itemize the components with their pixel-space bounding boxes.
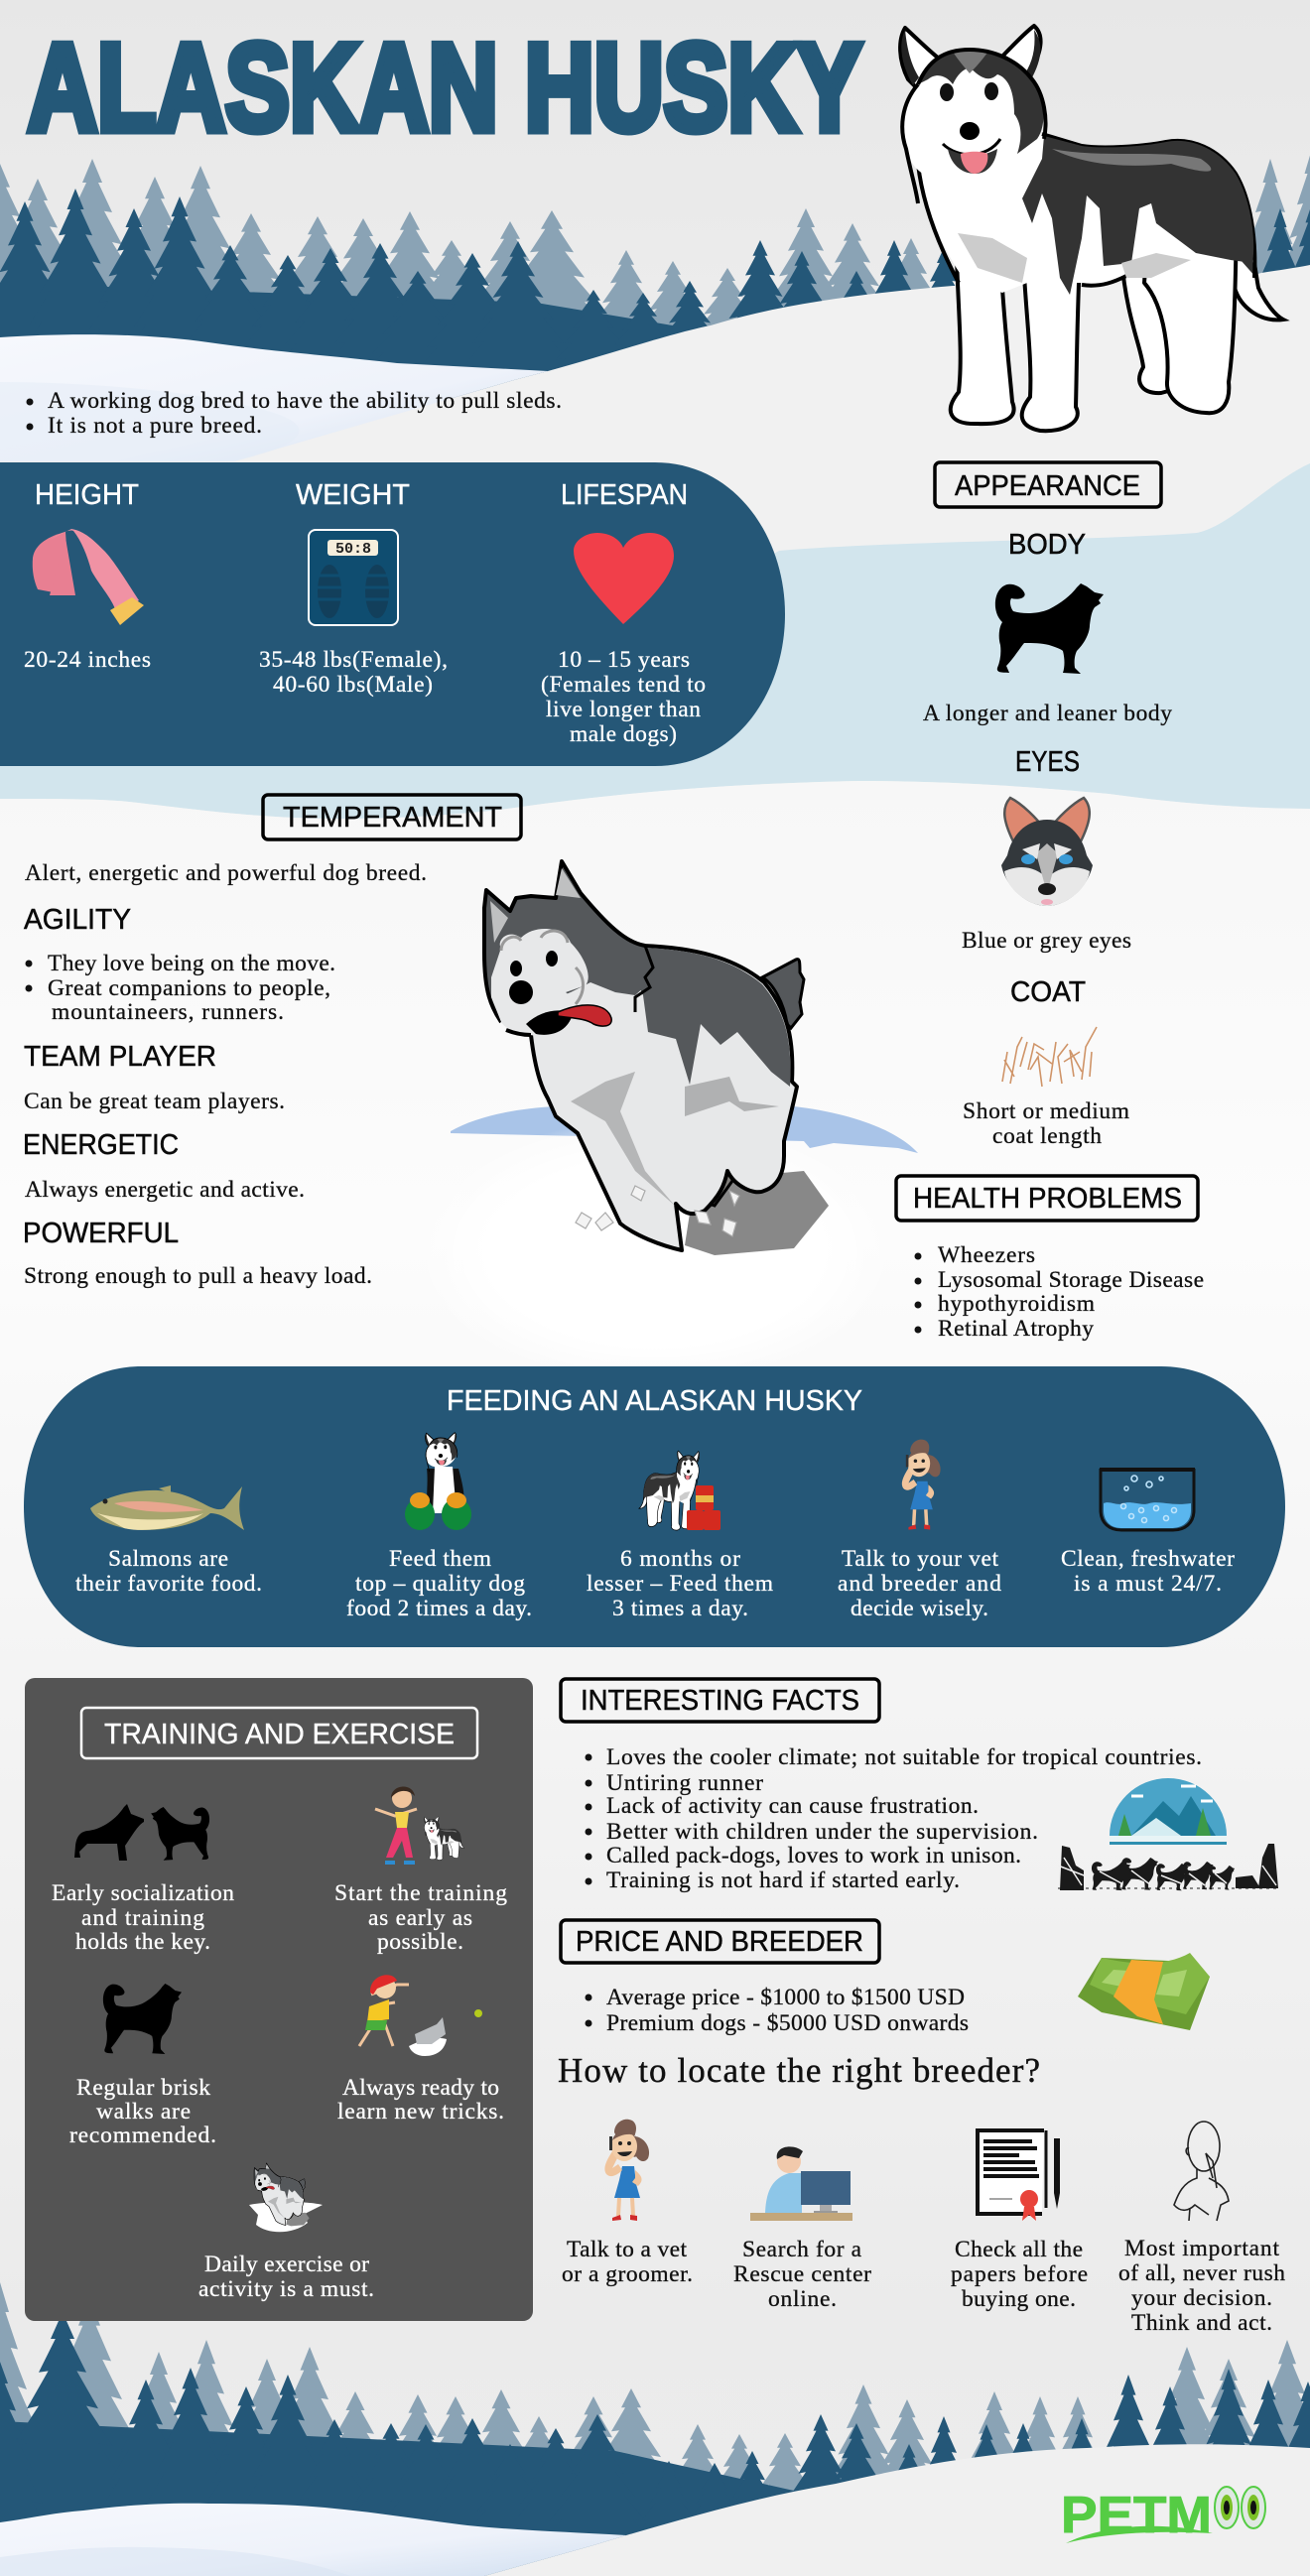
heading: interesting facts xyxy=(561,1679,879,1722)
interesting facts list xyxy=(586,1744,1202,1893)
agility bullets xyxy=(26,951,335,1025)
price list xyxy=(586,1985,969,2036)
icon: weighing scale: 50:8 xyxy=(335,541,371,558)
text: weight value: 40-60 lbs(Male) xyxy=(273,672,433,698)
health problems list xyxy=(915,1242,1204,1342)
text: six months: lesser – Feed them xyxy=(587,1571,773,1597)
text: never rush: your decision. xyxy=(1131,2285,1272,2311)
text: rescue center: Rescue center xyxy=(733,2261,871,2287)
text: daily exercise xyxy=(198,2252,374,2302)
text: body: A longer and leaner body xyxy=(923,701,1172,726)
icon: money stack xyxy=(1078,1953,1210,2030)
temperament text: Alert, energetic and powerful dog breed. xyxy=(25,860,427,886)
text: vet: Talk to your vet xyxy=(842,1546,998,1572)
text: six months: 6 months or xyxy=(620,1546,740,1572)
heading: price and breeder: PRICE AND BREEDER xyxy=(576,1926,863,1958)
text: rescue center: Search for a xyxy=(742,2237,862,2262)
text: vet: decide wisely. xyxy=(851,1596,988,1621)
heading: temperament: TEMPERAMENT xyxy=(283,802,502,834)
heading: locate breeder: How to locate the right breeder? xyxy=(558,2051,1040,2090)
icon: girl and dog xyxy=(375,1786,464,1863)
icon: woman on phone xyxy=(604,2120,649,2221)
illustration: standing husky xyxy=(900,26,1283,431)
text: new tricks: Always ready to xyxy=(342,2075,499,2101)
heading: appearance xyxy=(935,462,1161,507)
interesting facts list: Called pack-dogs, loves to work in unison. xyxy=(606,1843,1021,1868)
text: lifespan value xyxy=(541,647,706,747)
intro bullets: It is not a pure breed. xyxy=(48,413,262,439)
text: lifespan value: 10 – 15 years xyxy=(558,647,690,673)
text: weight value: 35-48 lbs(Female), xyxy=(259,647,448,673)
text: lifespan value: male dogs) xyxy=(570,721,677,747)
bottom forest scene xyxy=(0,2282,1310,2576)
icon: husky with food bags xyxy=(405,1433,471,1530)
icon: thinking man xyxy=(1174,2122,1229,2221)
icon: measuring tape xyxy=(33,529,144,625)
text: regular walks xyxy=(69,2075,216,2148)
icon: two dog silhouettes xyxy=(74,1804,209,1861)
text: never rush: Think and act. xyxy=(1131,2310,1272,2336)
heading: feeding: FEEDING AN ALASKAN HUSKY xyxy=(447,1385,862,1417)
temperament text xyxy=(23,860,427,1289)
heading: energetic: ENERGETIC xyxy=(23,1129,179,1161)
text: start training: possible. xyxy=(377,1929,463,1955)
text: powerful: Strong enough to pull a heavy load. xyxy=(24,1263,372,1289)
text: rescue center: online. xyxy=(768,2286,837,2312)
heading: health problems: HEALTH PROBLEMS xyxy=(913,1183,1182,1215)
text: start training: as early as xyxy=(368,1905,472,1931)
price list: Premium dogs - $5000 USD onwards xyxy=(606,2010,969,2036)
text: socialization: Early socialization xyxy=(52,1880,234,1906)
bottom snow hills xyxy=(0,2444,1310,2576)
heading: health problems xyxy=(896,1176,1198,1221)
health problems list: Wheezers xyxy=(938,1242,1035,1268)
text: socialization xyxy=(52,1880,234,1955)
health problems list: hypothyroidism xyxy=(938,1291,1095,1317)
heading: coat: COAT xyxy=(1010,976,1086,1008)
icon: person at computer xyxy=(750,2146,852,2221)
text: talk to a vet: Talk to a vet xyxy=(567,2237,687,2262)
interesting facts list: Better with children under the supervision. xyxy=(606,1819,1038,1845)
text: height value: 20-24 inches xyxy=(24,647,151,673)
interesting facts list: Training is not hard if started early. xyxy=(606,1868,960,1893)
text: coat xyxy=(963,1098,1129,1149)
text: talk to a vet: or a groomer. xyxy=(562,2261,693,2287)
health problems list: Retinal Atrophy xyxy=(938,1316,1094,1342)
logo: Petmoo: PETM xyxy=(1061,2487,1212,2544)
title: ALASKAN HUSKY xyxy=(28,20,861,157)
text: new tricks xyxy=(337,2075,504,2125)
text: team player: Can be great team players. xyxy=(24,1089,285,1114)
price list: Average price - $1000 to $1500 USD xyxy=(606,1985,965,2010)
interesting facts list: Loves the cooler climate; not suitable for tropical countries. xyxy=(606,1744,1202,1770)
text: check papers: papers before xyxy=(951,2261,1088,2287)
text: water xyxy=(1061,1546,1235,1597)
text: water: is a must 24/7. xyxy=(1074,1571,1222,1597)
heading: body: BODY xyxy=(1008,529,1086,561)
text: lifespan value: (Females tend to xyxy=(541,672,706,698)
text: never rush: of all, never rush xyxy=(1118,2260,1285,2286)
heading: interesting facts: INTERESTING FACTS xyxy=(581,1685,859,1717)
icon: water bowl xyxy=(1100,1469,1195,1530)
intro bullets xyxy=(26,388,562,439)
agility bullets: Great companions to people, xyxy=(48,975,330,1001)
heading: team player: TEAM PLAYER xyxy=(24,1041,216,1073)
text: six months: 3 times a day. xyxy=(612,1596,748,1621)
text: start training xyxy=(334,1880,507,1955)
text: new tricks: learn new tricks. xyxy=(337,2099,504,2125)
heading: training and exercise xyxy=(81,1708,477,1758)
heading: powerful: POWERFUL xyxy=(23,1218,179,1249)
text: vet xyxy=(838,1546,1001,1621)
text: energetic: Always energetic and active. xyxy=(25,1177,305,1203)
icon: salmon xyxy=(90,1485,244,1530)
health problems list: Lysosomal Storage Disease xyxy=(938,1267,1204,1293)
agility bullets: They love being on the move. xyxy=(48,951,335,976)
heading: appearance: APPEARANCE xyxy=(955,470,1140,502)
intro bullets: A working dog bred to have the ability to pull sleds. xyxy=(48,388,562,414)
text: socialization: and training xyxy=(81,1905,204,1931)
text: check papers xyxy=(951,2237,1088,2312)
text: top quality food xyxy=(346,1546,532,1621)
text: eyes: Blue or grey eyes xyxy=(962,928,1131,954)
text: salmon: Salmons are xyxy=(108,1546,228,1572)
heading: eyes: EYES xyxy=(1015,746,1080,778)
heading: weight: WEIGHT xyxy=(296,479,410,511)
panel: training and exercise xyxy=(25,1678,533,2321)
icon: dog sled team xyxy=(1058,1844,1280,1890)
text: start training: Start the training xyxy=(334,1880,507,1906)
text: top quality food: food 2 times a day. xyxy=(346,1596,532,1621)
text: never rush xyxy=(1118,2236,1285,2336)
heading: temperament xyxy=(263,795,521,839)
snow hills xyxy=(0,265,1310,834)
icon: heart xyxy=(574,533,674,624)
heading: lifespan: LIFESPAN xyxy=(561,479,688,511)
icon: weighing scale xyxy=(309,530,398,625)
text: weight value xyxy=(259,647,448,698)
panel: height, weight, lifespan xyxy=(0,462,785,766)
text: six months xyxy=(587,1546,773,1621)
heading: agility: AGILITY xyxy=(24,904,131,936)
text: regular walks: recommended. xyxy=(69,2123,216,2148)
interesting facts list: Untiring runner xyxy=(606,1770,763,1796)
icon: woman on phone xyxy=(902,1440,941,1530)
text: lifespan value: live longer than xyxy=(546,697,701,722)
top forest scene xyxy=(0,149,1310,398)
text: rescue center xyxy=(733,2237,871,2312)
icon: snow globe xyxy=(1110,1778,1227,1845)
text: salmon xyxy=(75,1546,262,1597)
interesting facts list: Lack of activity can cause frustration. xyxy=(606,1793,979,1819)
heading: height: HEIGHT xyxy=(35,479,139,511)
text: check papers: Check all the xyxy=(955,2237,1083,2262)
icon: boy and dog fetching xyxy=(359,1975,482,2056)
lower background sheet xyxy=(0,781,1310,2576)
text: vet: and breeder and xyxy=(838,1571,1001,1597)
pale blue wave band xyxy=(0,463,1310,819)
text: check papers: buying one. xyxy=(962,2286,1076,2312)
text: daily exercise: activity is a must. xyxy=(198,2276,374,2302)
text: coat: coat length xyxy=(992,1123,1102,1149)
text: top quality food: top – quality dog xyxy=(355,1571,525,1597)
text: never rush: Most important xyxy=(1124,2236,1279,2261)
icon: coat hair xyxy=(1002,1027,1097,1087)
text: regular walks: Regular brisk xyxy=(76,2075,210,2101)
icon: husky face xyxy=(1001,798,1093,906)
text: socialization: holds the key. xyxy=(75,1929,210,1955)
agility bullets: mountaineers, runners. xyxy=(52,999,284,1025)
icon: dog silhouette xyxy=(995,583,1104,674)
icon: small running husky on snow xyxy=(249,2163,323,2232)
text: talk to a vet xyxy=(562,2237,693,2287)
panel: feeding xyxy=(24,1366,1285,1647)
illustration: running husky on snow xyxy=(417,861,918,1386)
text: top quality food: Feed them xyxy=(389,1546,491,1572)
icon: dog silhouette walking xyxy=(103,1984,182,2054)
text: water: Clean, freshwater xyxy=(1061,1546,1235,1572)
icon: husky with cans xyxy=(639,1451,720,1530)
text: daily exercise: Daily exercise or xyxy=(204,2252,369,2277)
text: coat: Short or medium xyxy=(963,1098,1129,1124)
heading: training and exercise: TRAINING AND EXERCISE xyxy=(104,1719,455,1750)
text: regular walks: walks are xyxy=(96,2099,191,2125)
text: salmon: their favorite food. xyxy=(75,1571,262,1597)
icon: certificate document xyxy=(978,2130,1060,2221)
